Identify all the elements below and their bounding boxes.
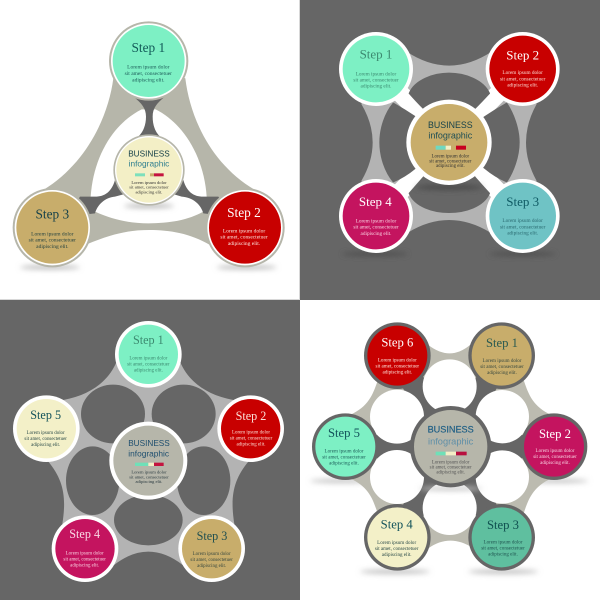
openings <box>380 73 519 212</box>
step 5 circle: adipiscing elit. <box>31 443 60 448</box>
step 1 circle: Lorem ipsum dolor <box>356 71 397 77</box>
step 2 circle: Step 2 <box>539 427 571 441</box>
step 2 circle <box>205 188 285 267</box>
step 3 circle: adipiscing elit. <box>197 564 226 569</box>
step 3 circle: Step 3 <box>487 518 519 532</box>
step 2 circle <box>486 32 560 106</box>
step 4 circle: sit amet, consectetuer <box>375 546 419 552</box>
step 1 circle <box>468 322 535 389</box>
step 1 circle: sit amet, consectetuer <box>480 364 524 370</box>
step 3 circle <box>468 504 535 571</box>
step 4 circle: adipiscing elit. <box>361 231 391 237</box>
step 6 circle: Lorem ipsum dolor <box>378 358 417 364</box>
step 2 circle <box>217 395 284 462</box>
step 4 circle: Lorem ipsum dolor <box>377 540 416 546</box>
step 1 circle: sit amet, consectetuer <box>127 363 170 368</box>
step 3 circle: adipiscing elit. <box>507 231 538 237</box>
center business circle: infographic <box>428 436 474 446</box>
step 3 circle: sit amet, consectetuer <box>190 558 233 563</box>
step 5 circle: adipiscing elit. <box>329 461 359 467</box>
step 1 circle: sit amet, consectetuer <box>353 78 399 84</box>
step 1 circle <box>115 321 182 388</box>
step 1 circle: Step 1 <box>360 46 392 61</box>
step 2 circle: adipiscing elit. <box>540 460 570 466</box>
step 2 circle: adipiscing elit. <box>228 241 261 247</box>
center business circle: Lorem ipsum dolor <box>432 154 470 159</box>
step 2 circle: Step 2 <box>506 47 539 62</box>
step 3 circle <box>486 179 560 253</box>
center business circle: adipiscing elit. <box>136 189 162 194</box>
center business circle: adipiscing elit. <box>436 164 465 169</box>
center business circle: infographic <box>128 448 169 458</box>
step 3 circle: sit amet, consectetuer <box>29 238 76 244</box>
center business circle: adipiscing elit. <box>136 479 162 484</box>
step 3 circle: Lorem ipsum dolor <box>31 231 74 237</box>
step 3 circle: Step 3 <box>506 194 539 209</box>
step 1 circle: Step 1 <box>486 336 518 350</box>
center business circle <box>410 406 491 487</box>
step 1 circle: sit amet, consectetuer <box>125 71 172 77</box>
step 4 circle: Step 4 <box>359 194 392 209</box>
step 6 circle <box>364 322 431 389</box>
step 1 circle: adipiscing elit. <box>361 84 391 90</box>
step 1 circle: Step 1 <box>131 40 165 55</box>
step 4 circle: Lorem ipsum dolor <box>66 551 104 556</box>
step 3 circle: Lorem ipsum dolor <box>502 218 543 224</box>
step 5 circle <box>13 395 80 462</box>
step 1 circle <box>339 32 413 106</box>
openings <box>66 385 230 545</box>
spokes <box>46 354 251 549</box>
step 4 circle: Step 4 <box>69 527 100 541</box>
step 2 circle: Lorem ipsum dolor <box>502 70 543 76</box>
step 2 circle: sit amet, consectetuer <box>230 436 273 441</box>
center shadow <box>419 487 482 491</box>
step 4 circle: sit amet, consectetuer <box>353 225 399 231</box>
step 1 circle: Lorem ipsum dolor <box>483 358 522 364</box>
center shadow <box>124 204 174 208</box>
step 1 circle: Lorem ipsum dolor <box>127 65 170 71</box>
step 3 circle: Lorem ipsum dolor <box>193 552 231 557</box>
step 2 circle: Step 2 <box>236 409 266 423</box>
step 4 circle: adipiscing elit. <box>382 552 412 558</box>
white spokes <box>376 69 523 216</box>
step 2 circle: sit amet, consectetuer <box>500 76 546 82</box>
step 5 circle: Step 5 <box>328 426 360 440</box>
step 1 circle: Step 1 <box>133 333 164 347</box>
step 2 circle: Lorem ipsum dolor <box>536 448 575 454</box>
panel: six step diagram on white <box>300 300 600 600</box>
dark spokes <box>345 356 554 537</box>
step 3 circle: adipiscing elit. <box>36 244 69 250</box>
step 3 circle <box>178 515 245 582</box>
step 4 circle: sit amet, consectetuer <box>63 557 106 562</box>
panel: three step diagram on white <box>0 0 300 300</box>
step 5 circle: sit amet, consectetuer <box>24 437 67 442</box>
step 3 circle: sit amet, consectetuer <box>481 546 525 552</box>
center business circle: adipiscing elit. <box>436 471 465 476</box>
center business circle: sit amet, consectetuer <box>429 159 472 164</box>
step 2 circle: adipiscing elit. <box>237 442 265 447</box>
step 6 circle: adipiscing elit. <box>382 370 412 376</box>
center business circle <box>113 134 185 206</box>
step 2 circle: Lorem ipsum dolor <box>232 430 270 435</box>
white openings <box>370 359 529 535</box>
center business circle: BUSINESS <box>428 120 473 130</box>
step 4 circle <box>52 515 118 582</box>
step 2 circle: Step 2 <box>227 205 261 220</box>
shadows <box>342 252 556 256</box>
step 2 circle: sit amet, consectetuer <box>220 235 268 241</box>
step 6 circle: sit amet, consectetuer <box>376 364 419 370</box>
center business circle: BUSINESS <box>428 425 474 435</box>
center business circle: Lorem ipsum dolor <box>131 470 167 475</box>
step 5 circle: Lorem ipsum dolor <box>27 431 65 436</box>
step 6 circle: Step 6 <box>381 335 413 349</box>
step 3 circle: Lorem ipsum dolor <box>484 540 523 546</box>
step 3 circle: adipiscing elit. <box>488 552 518 558</box>
step 3 circle: Step 3 <box>35 206 70 221</box>
center business circle: BUSINESS <box>128 150 170 159</box>
connector frame <box>361 52 537 232</box>
step 1 circle: adipiscing elit. <box>134 369 163 374</box>
connector frame <box>43 61 255 245</box>
step 1 circle: adipiscing elit. <box>487 370 517 376</box>
center business circle: Lorem ipsum dolor <box>131 180 167 185</box>
panel: four step diagram on gray <box>300 0 600 300</box>
step 1 circle: Lorem ipsum dolor <box>129 357 168 362</box>
step 5 circle: sit amet, consectetuer <box>322 455 366 461</box>
step 2 circle: sit amet, consectetuer <box>533 454 577 460</box>
shadows <box>310 479 588 574</box>
step 4 circle <box>339 179 413 253</box>
step 4 circle: Step 4 <box>381 517 413 531</box>
center business circle <box>406 100 492 185</box>
connector frame <box>345 345 554 548</box>
center business circle: sit amet, consectetuer <box>430 466 472 471</box>
step 4 circle: adipiscing elit. <box>70 563 99 568</box>
center business circle: infographic <box>129 159 169 169</box>
step 4 circle <box>364 504 431 571</box>
center business circle: BUSINESS <box>128 439 170 448</box>
step 2 circle: Lorem ipsum dolor <box>223 228 265 234</box>
step 5 circle: Lorem ipsum dolor <box>325 449 364 455</box>
center business circle: sit amet, consectetuer <box>129 185 169 191</box>
center shadow <box>416 185 482 190</box>
step 5 circle <box>312 413 379 480</box>
step 1 circle: adipiscing elit. <box>132 77 165 83</box>
shadows under circles <box>20 265 277 269</box>
step 5 circle: Step 5 <box>30 408 61 422</box>
step 3 circle: sit amet, consectetuer <box>500 224 546 230</box>
step 1 circle <box>109 21 188 101</box>
center business circle: infographic <box>428 131 473 141</box>
step 2 circle <box>521 413 587 480</box>
step 2 circle: adipiscing elit. <box>507 82 538 88</box>
step 4 circle: Lorem ipsum dolor <box>356 218 397 224</box>
dark spokes <box>67 97 233 217</box>
center business circle <box>109 422 187 500</box>
step 3 circle: Step 3 <box>197 529 227 543</box>
step 3 circle <box>13 188 92 267</box>
inner white opening <box>91 109 207 223</box>
connector frame <box>46 354 251 565</box>
center business circle: Lorem ipsum dolor <box>432 460 470 465</box>
panel: five step diagram on gray <box>0 300 300 600</box>
center business circle: sit amet, consectetuer <box>129 474 169 480</box>
